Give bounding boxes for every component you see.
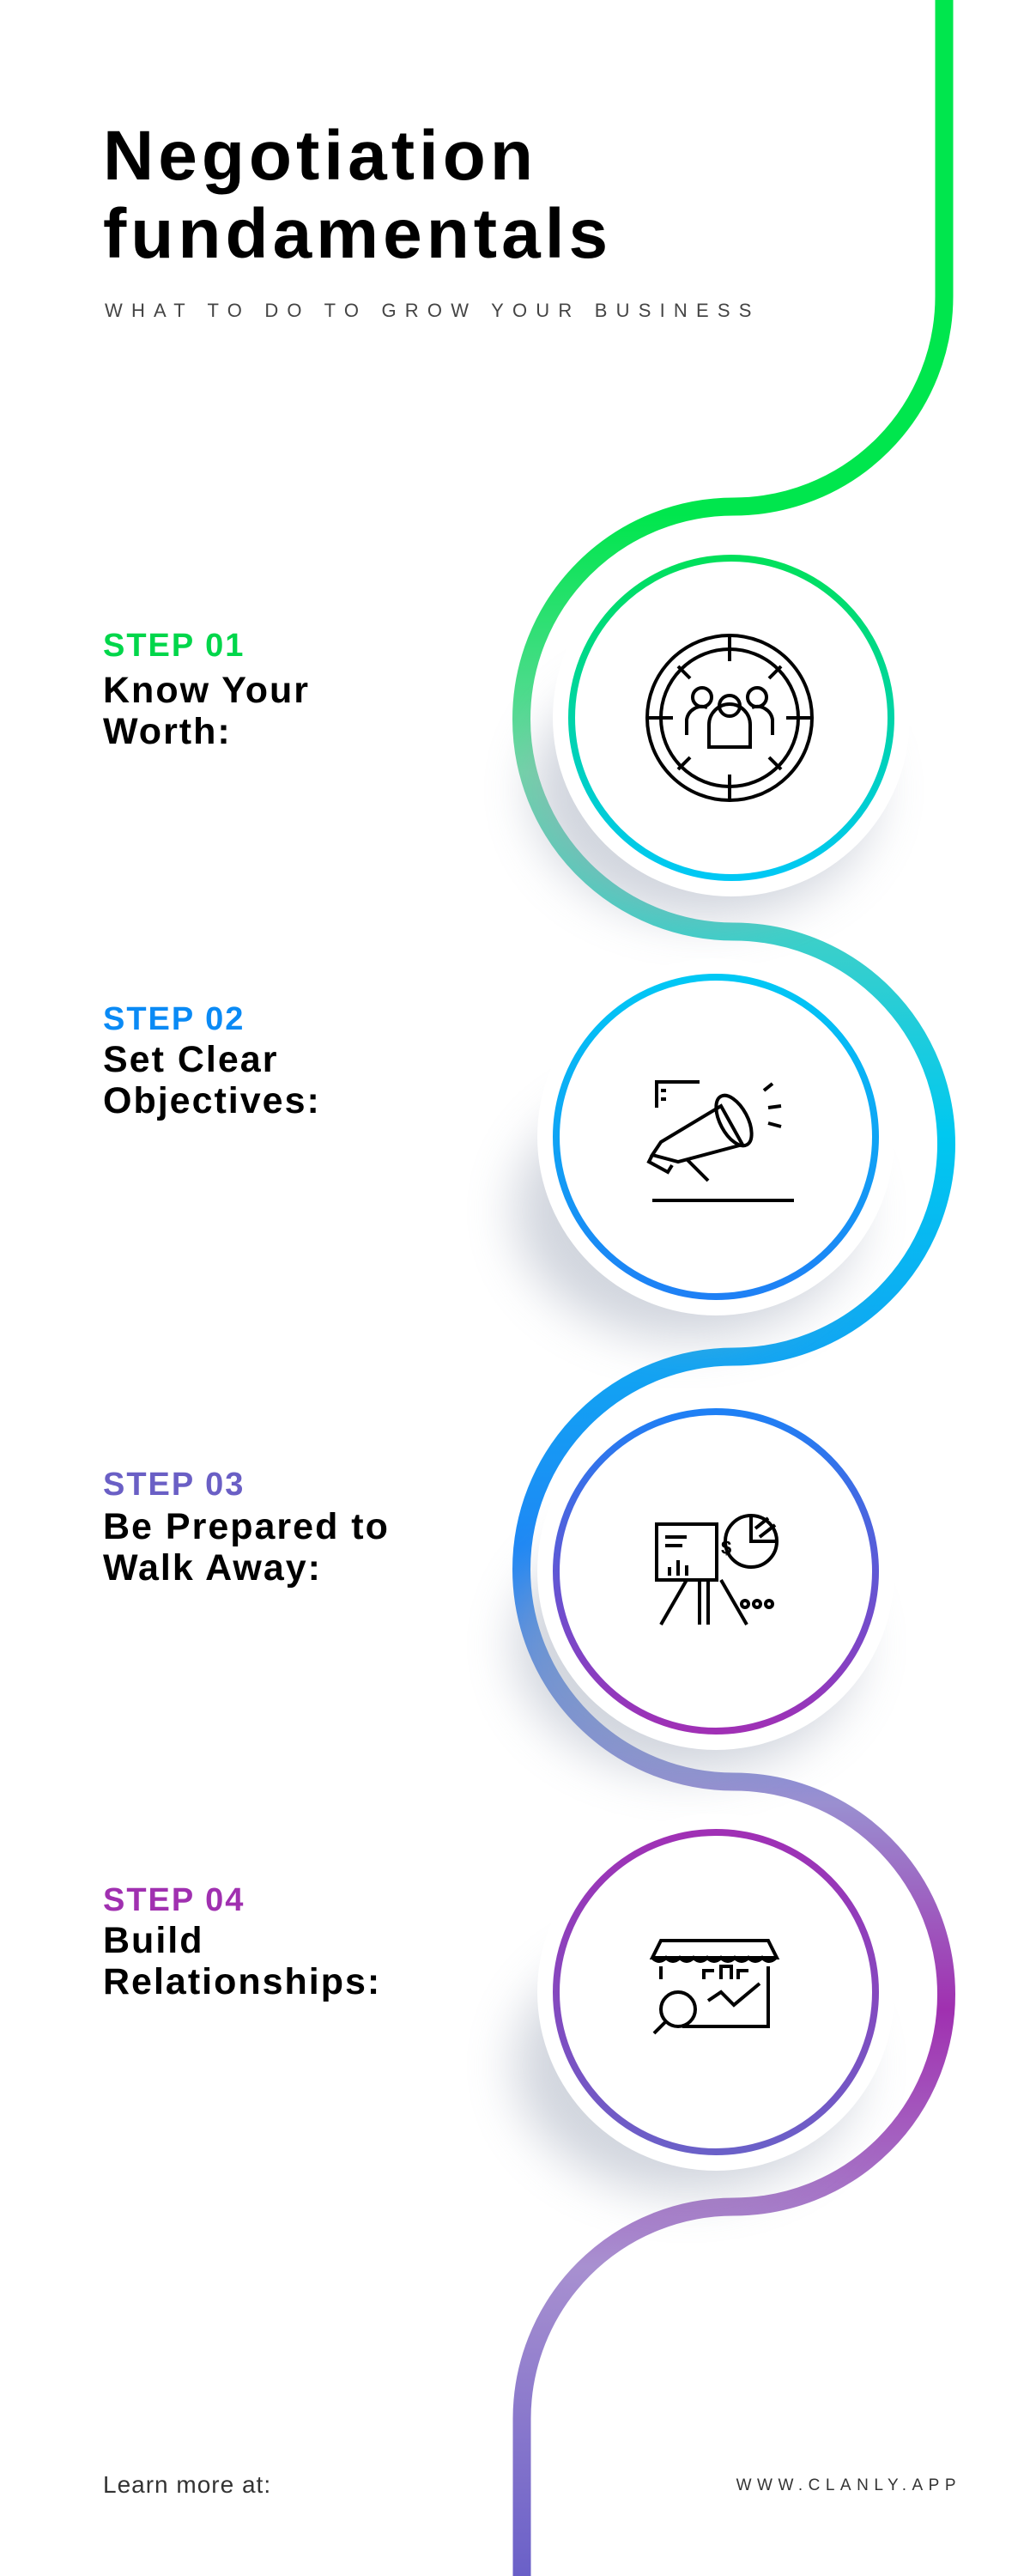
step 04 label: STEP 04 — [103, 1882, 245, 1918]
step 04 heading — [103, 1920, 381, 2002]
title — [103, 117, 612, 273]
step 01 heading: Know Your — [103, 670, 310, 711]
subtitle: WHAT TO DO TO GROW YOUR BUSINESS — [105, 300, 760, 321]
step 02 heading — [103, 1039, 321, 1121]
step 02 label: STEP 02 — [103, 1001, 245, 1037]
step 01 heading: Worth: — [103, 711, 232, 752]
circle 4 — [515, 1814, 894, 2194]
footer: website: WWW.CLANLY.APP — [736, 2476, 961, 2494]
step 02 heading: Set Clear — [103, 1039, 278, 1080]
footer: learn more: Learn more at: — [103, 2471, 271, 2498]
step 02 heading: Objectives: — [103, 1080, 321, 1121]
step 03 heading: Be Prepared to — [103, 1506, 390, 1547]
icon: target with people — [647, 635, 812, 800]
step 03 heading: Walk Away: — [103, 1547, 322, 1589]
icon: presentation with pie chart: $ — [721, 1537, 731, 1558]
icon: presentation with pie chart — [657, 1516, 777, 1625]
step 01 label: STEP 01 — [103, 628, 245, 664]
step 04 heading: Relationships: — [103, 1961, 381, 2002]
icon: megaphone — [649, 1082, 794, 1200]
step 03 heading — [103, 1506, 390, 1589]
step 03 label: STEP 03 — [103, 1467, 245, 1503]
circle 3 — [515, 1393, 894, 1773]
icon: shop with chart — [652, 1941, 777, 2033]
step 01 heading — [103, 670, 310, 752]
path: winding line — [522, 0, 946, 2576]
title: Negotiation — [103, 117, 537, 195]
step 04 heading: Build — [103, 1920, 203, 1961]
title: fundamentals — [103, 195, 612, 273]
circle 2 — [515, 958, 894, 1340]
circle 1 — [532, 539, 910, 919]
